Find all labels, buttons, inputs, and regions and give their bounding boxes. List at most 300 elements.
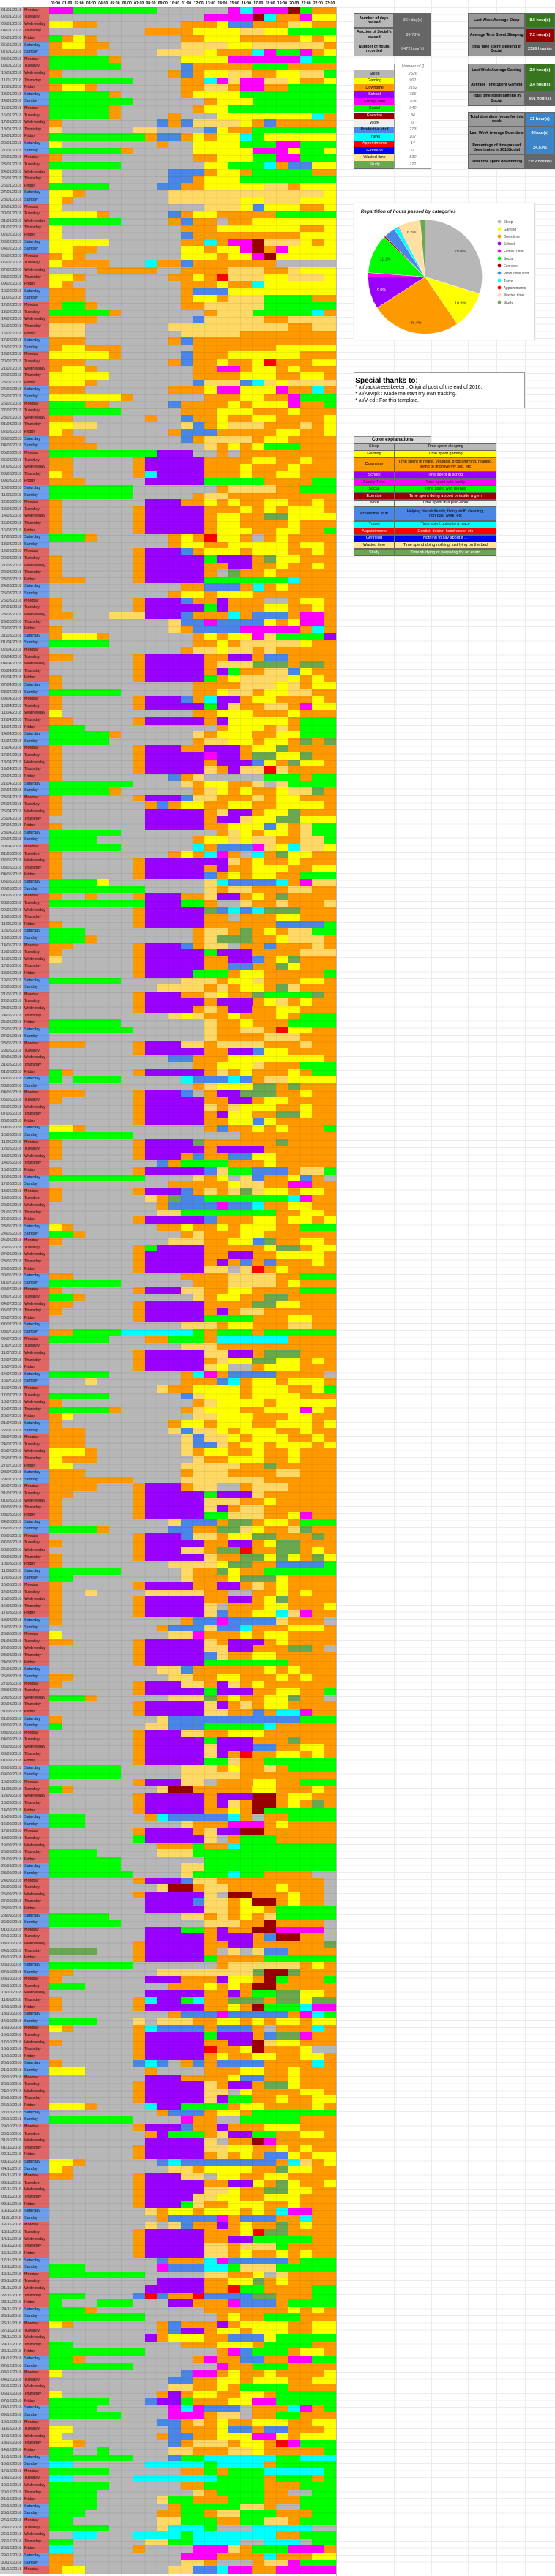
- daily log: date, weekday and 24 hourly cells per row: Wednesday: [24, 1646, 45, 1650]
- color explanations table: [354, 443, 496, 556]
- daily log: date, weekday and 24 hourly cells per row: Tuesday: [24, 950, 40, 954]
- color explanations table: Nothing to say about it ...: [423, 536, 468, 540]
- daily log: date, weekday and 24 hourly cells per row: Wednesday: [24, 2286, 45, 2291]
- daily log: date, weekday and 24 hourly cells per row: Wednesday: [24, 711, 45, 715]
- daily log: date, weekday and 24 hourly cells per row: 03/02/2018: [1, 240, 21, 244]
- daily log: date, weekday and 24 hourly cells per row: Monday: [24, 943, 39, 948]
- daily log: date, weekday and 24 hourly cells per row: 11/04/2018: [1, 711, 21, 715]
- table: hours per category: Gaming: [368, 78, 381, 83]
- daily log: date, weekday and 24 hourly cells per row: 22/12/2018: [1, 2504, 21, 2509]
- daily log: date, weekday and 24 hourly cells per row: Wednesday: [24, 613, 45, 617]
- daily log: date, weekday and 24 hourly cells per row: 30/06/2018: [1, 1273, 21, 1278]
- daily log: date, weekday and 24 hourly cells per row: 02/02/2018: [1, 233, 21, 237]
- daily log: date, weekday and 24 hourly cells per row: 28/08/2018: [1, 1688, 21, 1693]
- daily log: date, weekday and 24 hourly cells per row: Monday: [24, 1337, 39, 1341]
- daily log: date, weekday and 24 hourly cells per row: Friday: [24, 1316, 35, 1320]
- daily log: date, weekday and 24 hourly cells per row: 02/07/2018: [1, 1287, 21, 1292]
- daily log: date, weekday and 24 hourly cells per row: Friday: [24, 85, 35, 89]
- daily log: date, weekday and 24 hourly cells per row: 16/02/2018: [1, 332, 21, 336]
- daily log: date, weekday and 24 hourly cells per row: Monday: [24, 599, 39, 603]
- daily log: date, weekday and 24 hourly cells per row: Friday: [24, 1365, 35, 1369]
- daily log: date, weekday and 24 hourly cells per row: Thursday: [24, 1604, 41, 1609]
- daily log: date, weekday and 24 hourly cells per row: 01/02/2018: [1, 225, 21, 230]
- daily log: date, weekday and 24 hourly cells per row: 17/03/2018: [1, 535, 21, 539]
- daily log: date, weekday and 24 hourly cells per row: 10/01/2018: [1, 71, 21, 75]
- daily log: date, weekday and 24 hourly cells per row: Sunday: [24, 99, 38, 103]
- daily log: date, weekday and 24 hourly cells per row: Monday: [24, 894, 39, 898]
- daily log: date, weekday and 24 hourly cells per row: 30/05/2018: [1, 1055, 21, 1060]
- daily log: date, weekday and 24 hourly cells per row: Thursday: [24, 1998, 41, 2002]
- daily log: date, weekday and 24 hourly cells per row: Sunday: [24, 1772, 38, 1777]
- daily log: date, weekday and 24 hourly cells per row: Monday: [24, 1534, 39, 1538]
- daily log: date, weekday and 24 hourly cells per row: 13/03/2018: [1, 507, 21, 512]
- daily log: date, weekday and 24 hourly cells per row: Thursday: [24, 1850, 41, 1854]
- daily log: date, weekday and 24 hourly cells per row: 19/07/2018: [1, 1407, 21, 1412]
- table: hours per category: 107: [409, 135, 416, 139]
- daily log: date, weekday and 24 hourly cells per row: Sunday: [24, 1133, 38, 1137]
- daily log: date, weekday and 24 hourly cells per row: 23/02/2018: [1, 381, 21, 385]
- daily log: date, weekday and 24 hourly cells per row: 10/12/2018: [1, 2420, 21, 2425]
- daily log: date, weekday and 24 hourly cells per row: 18/06/2018: [1, 1189, 21, 1194]
- daily log: date, weekday and 24 hourly cells per row: Saturday: [24, 1667, 40, 1671]
- daily log: date, weekday and 24 hourly cells per row: Tuesday: [24, 1885, 40, 1890]
- daily log: date, weekday and 24 hourly cells per row: 23/07/2018: [1, 1435, 21, 1439]
- daily log: date, weekday and 24 hourly cells per row: 21/03/2018: [1, 564, 21, 568]
- daily log: date, weekday and 24 hourly cells per row: Wednesday: [24, 2483, 45, 2487]
- daily log: date, weekday and 24 hourly cells per row: Wednesday: [24, 317, 45, 321]
- daily log: date, weekday and 24 hourly cells per row: 06/02/2018: [1, 261, 21, 265]
- daily log: date, weekday and 24 hourly cells per row: Tuesday: [24, 999, 40, 1003]
- daily log: date, weekday and 24 hourly cells per row: 26/07/2018: [1, 1456, 21, 1461]
- daily log: date, weekday and 24 hourly cells per row: 07/06/2018: [1, 1112, 21, 1116]
- daily log: date, weekday and 24 hourly cells per row: Saturday: [24, 190, 40, 195]
- daily log: date, weekday and 24 hourly cells per row: Friday: [24, 233, 35, 237]
- daily log: date, weekday and 24 hourly cells per row: Saturday: [24, 2258, 40, 2263]
- daily log: date, weekday and 24 hourly cells per row: Tuesday: [24, 1984, 40, 1988]
- daily log: date, weekday and 24 hourly cells per row: Sunday: [24, 591, 38, 596]
- daily log: date, weekday and 24 hourly cells per row: 24/10/2018: [1, 2089, 21, 2094]
- daily log: date, weekday and 24 hourly cells per row: 23/06/2018: [1, 1224, 21, 1229]
- daily log: date, weekday and 24 hourly cells per row: 22/03/2018: [1, 570, 21, 574]
- daily log: date, weekday and 24 hourly cells per row: Sunday: [24, 345, 38, 350]
- daily log: date, weekday and 24 hourly cells per row: Monday: [24, 1632, 39, 1636]
- daily log: date, weekday and 24 hourly cells per row: 04/08/2018: [1, 1520, 21, 1524]
- daily log: date, weekday and 24 hourly cells per row: Monday: [24, 2420, 39, 2425]
- daily log: date, weekday and 24 hourly cells per row: Thursday: [24, 2441, 41, 2445]
- daily log: date, weekday and 24 hourly cells per row: 19/12/2018: [1, 2483, 21, 2487]
- daily log: date, weekday and 24 hourly cells per row: 08/10/2018: [1, 1977, 21, 1981]
- daily log: date, weekday and 24 hourly cells per row: Friday: [24, 1611, 35, 1615]
- daily log: date, weekday and 24 hourly cells per row: Sunday: [24, 1232, 38, 1236]
- daily log: date, weekday and 24 hourly cells per row: 30/01/2018: [1, 211, 21, 216]
- stats: downtime: Last Week Average Downtime: [470, 131, 524, 135]
- daily log: date, weekday and 24 hourly cells per row: Friday: [24, 1070, 35, 1074]
- daily log: date, weekday and 24 hourly cells per row: Thursday: [24, 1210, 41, 1215]
- hour column headers: 09:00: [158, 1, 168, 6]
- daily log: date, weekday and 24 hourly cells per row: 07/02/2018: [1, 268, 21, 272]
- daily log: date, weekday and 24 hourly cells per row: Wednesday: [24, 1991, 45, 1995]
- daily log: date, weekday and 24 hourly cells per row: Friday: [24, 1808, 35, 1812]
- daily log: date, weekday and 24 hourly cells per row: 01/09/2018: [1, 1717, 21, 1721]
- daily log: date, weekday and 24 hourly cells per row: Monday: [24, 845, 39, 849]
- daily log: date, weekday and 24 hourly cells per row: 11/02/2018: [1, 296, 21, 300]
- daily log: date, weekday and 24 hourly cells per row: Saturday: [24, 782, 40, 786]
- hour column headers: 17:00: [253, 1, 263, 6]
- daily log: date, weekday and 24 hourly cells per row: 05/08/2018: [1, 1527, 21, 1531]
- daily log: date, weekday and 24 hourly cells per row: Tuesday: [24, 1639, 40, 1644]
- daily log: date, weekday and 24 hourly cells per row: Tuesday: [24, 1787, 40, 1791]
- daily log: date, weekday and 24 hourly cells per row: 09/06/2018: [1, 1126, 21, 1130]
- daily log: date, weekday and 24 hourly cells per row: 24/06/2018: [1, 1232, 21, 1236]
- daily log: date, weekday and 24 hourly cells per row: Friday: [24, 872, 35, 877]
- daily log: date, weekday and 24 hourly cells per row: 18/04/2018: [1, 760, 21, 765]
- daily log: date, weekday and 24 hourly cells per row: 06/10/2018: [1, 1963, 21, 1967]
- daily log: date, weekday and 24 hourly cells per row: Thursday: [24, 1505, 41, 1510]
- daily log: date, weekday and 24 hourly cells per row: 10/08/2018: [1, 1562, 21, 1566]
- daily log: date, weekday and 24 hourly cells per row: Tuesday: [24, 211, 40, 216]
- daily log: date, weekday and 24 hourly cells per row: 15/05/2018: [1, 950, 21, 954]
- hour column headers: 19:00: [278, 1, 287, 6]
- daily log: date, weekday and 24 hourly cells per row: Friday: [24, 1857, 35, 1862]
- color explanations table: Time spent in reddit, youtube, programming, reading,: [398, 460, 493, 464]
- daily log: date, weekday and 24 hourly cells per row: Monday: [24, 2370, 39, 2375]
- daily log: date, weekday and 24 hourly cells per row: 01/07/2018: [1, 1281, 21, 1285]
- daily log: date, weekday and 24 hourly cells per row: Wednesday: [24, 1400, 45, 1404]
- daily log: date, weekday and 24 hourly cells per row: 18/03/2018: [1, 542, 21, 547]
- summary: days and hours passed: recorded: [366, 49, 382, 53]
- daily log: date, weekday and 24 hourly cells per row: Sunday: [24, 1822, 38, 1827]
- daily log: date, weekday and 24 hourly cells per row: 15/11/2018: [1, 2244, 21, 2248]
- daily log: date, weekday and 24 hourly cells per row: Wednesday: [24, 1942, 45, 1946]
- daily log: date, weekday and 24 hourly cells per row: 11/11/2018: [1, 2216, 21, 2220]
- daily log: date, weekday and 24 hourly cells per row: Wednesday: [24, 858, 45, 863]
- daily log: date, weekday and 24 hourly cells per row: 20/09/2018: [1, 1850, 21, 1854]
- daily log: date, weekday and 24 hourly cells per row: Wednesday: [24, 564, 45, 568]
- daily log: date, weekday and 24 hourly cells per row: 07/10/2018: [1, 1970, 21, 1974]
- daily log: date, weekday and 24 hourly cells per row: Wednesday: [24, 809, 45, 814]
- daily log: date, weekday and 24 hourly cells per row: Tuesday: [24, 2132, 40, 2136]
- daily log: date, weekday and 24 hourly cells per row: 06/03/2018: [1, 458, 21, 463]
- daily log: date, weekday and 24 hourly cells per row: 20/04/2018: [1, 774, 21, 779]
- daily log: date, weekday and 24 hourly cells per row: Tuesday: [24, 507, 40, 512]
- summary: days and hours passed: 99.73%: [406, 32, 420, 37]
- hour column headers: 10:00: [170, 1, 179, 6]
- daily log: date, weekday and 24 hourly cells per row: Wednesday: [24, 2187, 45, 2192]
- daily log: date, weekday and 24 hourly cells per row: 16/03/2018: [1, 528, 21, 533]
- daily log: date, weekday and 24 hourly cells per row: 31/12/2018: [1, 2567, 21, 2572]
- daily log: date, weekday and 24 hourly cells per row: Sunday: [24, 2413, 38, 2417]
- daily log: date, weekday and 24 hourly cells per row: 18/12/2018: [1, 2476, 21, 2480]
- daily log: date, weekday and 24 hourly cells per row: 17/09/2018: [1, 1829, 21, 1833]
- daily log: date, weekday and 24 hourly cells per row: 27/05/2018: [1, 1034, 21, 1038]
- table: hours per category: 530: [409, 155, 416, 160]
- daily log: date, weekday and 24 hourly cells per row: Tuesday: [24, 1147, 40, 1151]
- daily log: date, weekday and 24 hourly cells per row: Monday: [24, 697, 39, 701]
- daily log: date, weekday and 24 hourly cells per row: 05/02/2018: [1, 254, 21, 258]
- hour column headers: [51, 1, 335, 6]
- daily log: date, weekday and 24 hourly cells per row: 04/10/2018: [1, 1949, 21, 1953]
- daily log: date, weekday and 24 hourly cells per row: 11/12/2018: [1, 2427, 21, 2431]
- daily log: date, weekday and 24 hourly cells per row: 30/08/2018: [1, 1702, 21, 1707]
- color explanations table: Time spent in school: [427, 473, 463, 477]
- hour column headers: 03:00: [86, 1, 96, 6]
- color explanations table: non-paid work, etc: [429, 514, 462, 518]
- daily log: date, weekday and 24 hourly cells per row: 12/01/2018: [1, 85, 21, 89]
- daily log: date, weekday and 24 hourly cells per row: 03/06/2018: [1, 1084, 21, 1088]
- daily log: date, weekday and 24 hourly cells per row: Thursday: [24, 275, 41, 280]
- daily log: date, weekday and 24 hourly cells per row: 31/10/2018: [1, 2138, 21, 2143]
- daily log: date, weekday and 24 hourly cells per row: 28/06/2018: [1, 1259, 21, 1264]
- daily log: date, weekday and 24 hourly cells per row: 26/02/2018: [1, 402, 21, 406]
- daily log: date, weekday and 24 hourly cells per row: 08/05/2018: [1, 901, 21, 905]
- daily log: date, weekday and 24 hourly cells per row: 15/01/2018: [1, 106, 21, 111]
- daily log: date, weekday and 24 hourly cells per row: Thursday: [24, 1161, 41, 1165]
- daily log: date, weekday and 24 hourly cells per row: Thursday: [24, 422, 41, 427]
- daily log: date, weekday and 24 hourly cells per row: 30/12/2018: [1, 2561, 21, 2565]
- daily log: date, weekday and 24 hourly cells per row: Wednesday: [24, 1843, 45, 1848]
- daily log: date, weekday and 24 hourly cells per row: Tuesday: [24, 802, 40, 806]
- daily log: date, weekday and 24 hourly cells per row: 26/11/2018: [1, 2321, 21, 2326]
- daily log: date, weekday and 24 hourly cells per row: Monday: [24, 1977, 39, 1981]
- daily log: date, weekday and 24 hourly cells per row: Monday: [24, 1484, 39, 1489]
- daily log: date, weekday and 24 hourly cells per row: 27/02/2018: [1, 408, 21, 413]
- daily log: date, weekday and 24 hourly cells per row: Wednesday: [24, 1154, 45, 1158]
- daily log: date, weekday and 24 hourly cells per row: 16/06/2018: [1, 1175, 21, 1180]
- daily log: date, weekday and 24 hourly cells per row: 23/12/2018: [1, 2511, 21, 2515]
- daily log: date, weekday and 24 hourly cells per row: Wednesday: [24, 2532, 45, 2536]
- daily log: date, weekday and 24 hourly cells per row: 27/12/2018: [1, 2539, 21, 2544]
- daily log: date, weekday and 24 hourly cells per row: 23/03/2018: [1, 577, 21, 582]
- stats: gaming: 2.0 hour(s): [529, 68, 550, 72]
- daily log: date, weekday and 24 hourly cells per row: 24/12/2018: [1, 2518, 21, 2523]
- daily log: date, weekday and 24 hourly cells per row: 24/01/2018: [1, 170, 21, 174]
- daily log: date, weekday and 24 hourly cells per row: 27/06/2018: [1, 1252, 21, 1257]
- table: hours per category: 940: [409, 106, 416, 111]
- daily log: date, weekday and 24 hourly cells per row: Thursday: [24, 2047, 41, 2051]
- daily log: date, weekday and 24 hourly cells per row: Wednesday: [24, 907, 45, 912]
- daily log: date, weekday and 24 hourly cells per row: Tuesday: [24, 1442, 40, 1447]
- daily log: date, weekday and 24 hourly cells per row: 06/09/2018: [1, 1752, 21, 1756]
- hour column headers: 21:00: [302, 1, 311, 6]
- daily log: date, weekday and 24 hourly cells per row: Saturday: [24, 2209, 40, 2213]
- daily log: date, weekday and 24 hourly cells per row: Friday: [24, 479, 35, 483]
- daily log: date, weekday and 24 hourly cells per row: 04/11/2018: [1, 2167, 21, 2171]
- hour column headers: 04:00: [98, 1, 108, 6]
- daily log: date, weekday and 24 hourly cells per row: Saturday: [24, 92, 40, 97]
- daily log: date, weekday and 24 hourly cells per row: Thursday: [24, 2490, 41, 2495]
- daily log: date, weekday and 24 hourly cells per row: Wednesday: [24, 219, 45, 223]
- daily log: date, weekday and 24 hourly cells per row: Saturday: [24, 1273, 40, 1278]
- daily log: date, weekday and 24 hourly cells per row: Thursday: [24, 1112, 41, 1116]
- daily log: date, weekday and 24 hourly cells per row: Sunday: [24, 2167, 38, 2171]
- daily log: date, weekday and 24 hourly cells per row: 06/08/2018: [1, 1534, 21, 1538]
- hour column headers: 05:00: [110, 1, 120, 6]
- daily log: date, weekday and 24 hourly cells per row: 07/01/2018: [1, 50, 21, 54]
- daily log: date, weekday and 24 hourly cells per row: Tuesday: [24, 2476, 40, 2480]
- stats: gaming: Last Week Average Gaming: [472, 68, 521, 72]
- daily log: date, weekday and 24 hourly cells per row: 06/12/2018: [1, 2392, 21, 2396]
- table: hours per category: Travel: [369, 135, 380, 139]
- daily log: date, weekday and 24 hourly cells per row: 21/11/2018: [1, 2286, 21, 2291]
- stats: downtime: 21 hour(s): [530, 117, 550, 121]
- daily log: date, weekday and 24 hourly cells per row: 08/08/2018: [1, 1548, 21, 1552]
- daily log: date, weekday and 24 hourly cells per row: Thursday: [24, 1407, 41, 1412]
- daily log: date, weekday and 24 hourly cells per row: 18/08/2018: [1, 1618, 21, 1622]
- daily log: date, weekday and 24 hourly cells per row: Wednesday: [24, 1597, 45, 1601]
- color explanations table: Downtime: [365, 462, 383, 466]
- daily log: date, weekday and 24 hourly cells per row: Monday: [24, 2567, 39, 2572]
- table: hours per category: School: [368, 92, 381, 97]
- daily log: date, weekday and 24 hourly cells per row: 19/01/2018: [1, 134, 21, 138]
- daily log: date, weekday and 24 hourly cells per row: Sunday: [24, 394, 38, 399]
- pie slices: 25.4%: [410, 321, 421, 325]
- daily log: date, weekday and 24 hourly cells per row: Saturday: [24, 1618, 40, 1622]
- daily log: date, weekday and 24 hourly cells per row: Friday: [24, 1267, 35, 1271]
- daily log: date, weekday and 24 hourly cells per row: Monday: [24, 1583, 39, 1587]
- daily log: date, weekday and 24 hourly cells per row: 05/07/2018: [1, 1308, 21, 1313]
- daily log: date, weekday and 24 hourly cells per row: 05/09/2018: [1, 1745, 21, 1749]
- color explanations table: Helping friends/family, fixing stuff, cleaning,: [407, 509, 484, 514]
- daily log: date, weekday and 24 hourly cells per row: Tuesday: [24, 1049, 40, 1053]
- daily log: date, weekday and 24 hourly cells per row: 08/02/2018: [1, 275, 21, 280]
- daily log: date, weekday and 24 hourly cells per row: Monday: [24, 1829, 39, 1833]
- daily log: date, weekday and 24 hourly cells per row: 30/04/2018: [1, 845, 21, 849]
- daily log: date, weekday and 24 hourly cells per row: 04/07/2018: [1, 1302, 21, 1306]
- daily log: date, weekday and 24 hourly cells per row: Wednesday: [24, 514, 45, 518]
- daily log: date, weekday and 24 hourly cells per row: Saturday: [24, 2307, 40, 2312]
- daily log: date, weekday and 24 hourly cells per row: 13/07/2018: [1, 1365, 21, 1369]
- daily log: date, weekday and 24 hourly cells per row: Tuesday: [24, 261, 40, 265]
- table: hours per category: Productive stuff: [361, 127, 388, 132]
- daily log: date, weekday and 24 hourly cells per row: Monday: [24, 2518, 39, 2523]
- daily log: date, weekday and 24 hourly cells per row: 08/04/2018: [1, 690, 21, 694]
- daily log: date, weekday and 24 hourly cells per row: 05/03/2018: [1, 451, 21, 455]
- daily log: date, weekday and 24 hourly cells per row: Saturday: [24, 1077, 40, 1081]
- table: hours per category: [354, 64, 431, 169]
- daily log: date, weekday and 24 hourly cells per row: Tuesday: [24, 15, 40, 19]
- daily log: date, weekday and 24 hourly cells per row: Wednesday: [24, 760, 45, 765]
- daily log: date, weekday and 24 hourly cells per row: Friday: [24, 1119, 35, 1123]
- daily log: date, weekday and 24 hourly cells per row: 09/04/2018: [1, 697, 21, 701]
- daily log: date, weekday and 24 hourly cells per row: Wednesday: [24, 662, 45, 666]
- daily log: date, weekday and 24 hourly cells per row: 05/06/2018: [1, 1098, 21, 1102]
- daily log: date, weekday and 24 hourly cells per row: 21/01/2018: [1, 149, 21, 153]
- daily log: date, weekday and 24 hourly cells per row: 10/05/2018: [1, 915, 21, 919]
- daily log: date, weekday and 24 hourly cells per row: 01/11/2018: [1, 2146, 21, 2150]
- table: hours per category: Number of []: [402, 64, 424, 69]
- daily log: date, weekday and 24 hourly cells per row: Thursday: [24, 2539, 41, 2544]
- color explanations table: Social: [369, 487, 380, 491]
- daily log: date, weekday and 24 hourly cells per row: Saturday: [24, 387, 40, 392]
- table: hours per category: Work: [370, 121, 379, 125]
- daily log: date, weekday and 24 hourly cells per row: 16/04/2018: [1, 746, 21, 750]
- daily log: date, weekday and 24 hourly cells per row: 23/11/2018: [1, 2300, 21, 2304]
- daily log: date, weekday and 24 hourly cells per row: 04/12/2018: [1, 2378, 21, 2382]
- special thanks box: * /u/backstreetskeeter : Original post of the end of 2016.: [355, 385, 482, 390]
- daily log: date, weekday and 24 hourly cells per row: Sunday: [24, 2068, 38, 2073]
- daily log: date, weekday and 24 hourly cells per row: 08/09/2018: [1, 1766, 21, 1770]
- daily log: date, weekday and 24 hourly cells per row: Sunday: [24, 198, 38, 202]
- chart legend: Wasted time: [504, 293, 524, 298]
- daily log: date, weekday and 24 hourly cells per row: Friday: [24, 36, 35, 40]
- daily log: date, weekday and 24 hourly cells per row: Tuesday: [24, 113, 40, 118]
- daily log: date, weekday and 24 hourly cells per row: Saturday: [24, 978, 40, 983]
- daily log: date, weekday and 24 hourly cells per row: 31/05/2018: [1, 1063, 21, 1067]
- daily log: date, weekday and 24 hourly cells per row: 19/09/2018: [1, 1843, 21, 1848]
- daily log: date, weekday and 24 hourly cells per row: 15/06/2018: [1, 1168, 21, 1172]
- daily log: date, weekday and 24 hourly cells per row: Thursday: [24, 817, 41, 821]
- daily log: date, weekday and 24 hourly cells per row: Friday: [24, 2202, 35, 2206]
- daily log: date, weekday and 24 hourly cells per row: 15/08/2018: [1, 1597, 21, 1601]
- daily log: date, weekday and 24 hourly cells per row: 26/04/2018: [1, 817, 21, 821]
- daily log: date, weekday and 24 hourly cells per row: 22/02/2018: [1, 373, 21, 378]
- daily log: date, weekday and 24 hourly cells per row: 29/01/2018: [1, 205, 21, 209]
- daily log: date, weekday and 24 hourly cells per row: 01/04/2018: [1, 640, 21, 645]
- daily log: date, weekday and 24 hourly cells per row: Friday: [24, 1955, 35, 1960]
- color explanations table: Travel: [369, 522, 380, 526]
- daily log: date, weekday and 24 hourly cells per row: 01/08/2018: [1, 1499, 21, 1503]
- daily log: date, weekday and 24 hourly cells per row: 16/08/2018: [1, 1604, 21, 1609]
- daily log: date, weekday and 24 hourly cells per row: 15/10/2018: [1, 2026, 21, 2030]
- color explanations table: School: [368, 473, 380, 477]
- daily log: date, weekday and 24 hourly cells per row: 15/02/2018: [1, 324, 21, 329]
- daily log: date, weekday and 24 hourly cells per row: 24/02/2018: [1, 387, 21, 392]
- daily log: date, weekday and 24 hourly cells per row: 13/09/2018: [1, 1801, 21, 1805]
- chart legend: Social: [504, 257, 513, 261]
- stats: sleep: [468, 13, 555, 56]
- stats: sleep: Social: [491, 49, 502, 53]
- daily log: date, weekday and 24 hourly cells per row: Sunday: [24, 1379, 38, 1383]
- daily log: date, weekday and 24 hourly cells per row: 12/02/2018: [1, 303, 21, 307]
- daily log: date, weekday and 24 hourly cells per row: Thursday: [24, 2146, 41, 2150]
- table: hours per category: 2152: [409, 86, 417, 90]
- daily log: date, weekday and 24 hourly cells per row: Wednesday: [24, 465, 45, 469]
- daily log: date, weekday and 24 hourly cells per row: Friday: [24, 1464, 35, 1468]
- daily log: date, weekday and 24 hourly cells per row: Monday: [24, 2272, 39, 2277]
- daily log: date, weekday and 24 hourly cells per row: Monday: [24, 1189, 39, 1194]
- daily log: date, weekday and 24 hourly cells per row: Thursday: [24, 2392, 41, 2396]
- chart title: Repartition of hours passed by categories: [361, 209, 456, 214]
- stats: gaming: [468, 64, 555, 106]
- daily log: date, weekday and 24 hourly cells per row: Thursday: [24, 1949, 41, 1953]
- daily log: date, weekday and 24 hourly cells per row: Tuesday: [24, 1934, 40, 1939]
- daily log: date, weekday and 24 hourly cells per row: Thursday: [24, 767, 41, 771]
- daily log: date, weekday and 24 hourly cells per row: 10/03/2018: [1, 486, 21, 490]
- daily log: date, weekday and 24 hourly cells per row: Tuesday: [24, 1491, 40, 1496]
- daily log: date, weekday and 24 hourly cells per row: 01/10/2018: [1, 1928, 21, 1932]
- daily log: date, weekday and 24 hourly cells per row: 08/07/2018: [1, 1330, 21, 1334]
- daily log: date, weekday and 24 hourly cells per row: Friday: [24, 430, 35, 434]
- daily log: date, weekday and 24 hourly cells per row: 18/02/2018: [1, 345, 21, 350]
- daily log: date, weekday and 24 hourly cells per row: 26/03/2018: [1, 599, 21, 603]
- daily log: date, weekday and 24 hourly cells per row: Saturday: [24, 1864, 40, 1868]
- daily log: date, weekday and 24 hourly cells per row: Friday: [24, 1513, 35, 1517]
- daily log: date, weekday and 24 hourly cells per row: 10/11/2018: [1, 2209, 21, 2213]
- daily log: date, weekday and 24 hourly cells per row: Thursday: [24, 1308, 41, 1313]
- daily log: date, weekday and 24 hourly cells per row: Saturday: [24, 929, 40, 933]
- color explanations table: Time spend doing nothing, just lying on the bed: [403, 543, 488, 547]
- daily log: date, weekday and 24 hourly cells per row: 20/03/2018: [1, 556, 21, 561]
- table: hours per category: 121: [409, 162, 416, 167]
- daily log: date, weekday and 24 hourly cells per row: Friday: [24, 2448, 35, 2452]
- hour column headers: 08:00: [146, 1, 155, 6]
- daily log: date, weekday and 24 hourly cells per row: 29/05/2018: [1, 1049, 21, 1053]
- daily log: date, weekday and 24 hourly cells per row: Monday: [24, 2026, 39, 2030]
- daily log: date, weekday and 24 hourly cells per row: Saturday: [24, 535, 40, 539]
- daily log: date, weekday and 24 hourly cells per row: 25/08/2018: [1, 1667, 21, 1671]
- summary: days and hours passed: Number of days: [360, 16, 388, 20]
- daily log: date, weekday and 24 hourly cells per row: 04/04/2018: [1, 662, 21, 666]
